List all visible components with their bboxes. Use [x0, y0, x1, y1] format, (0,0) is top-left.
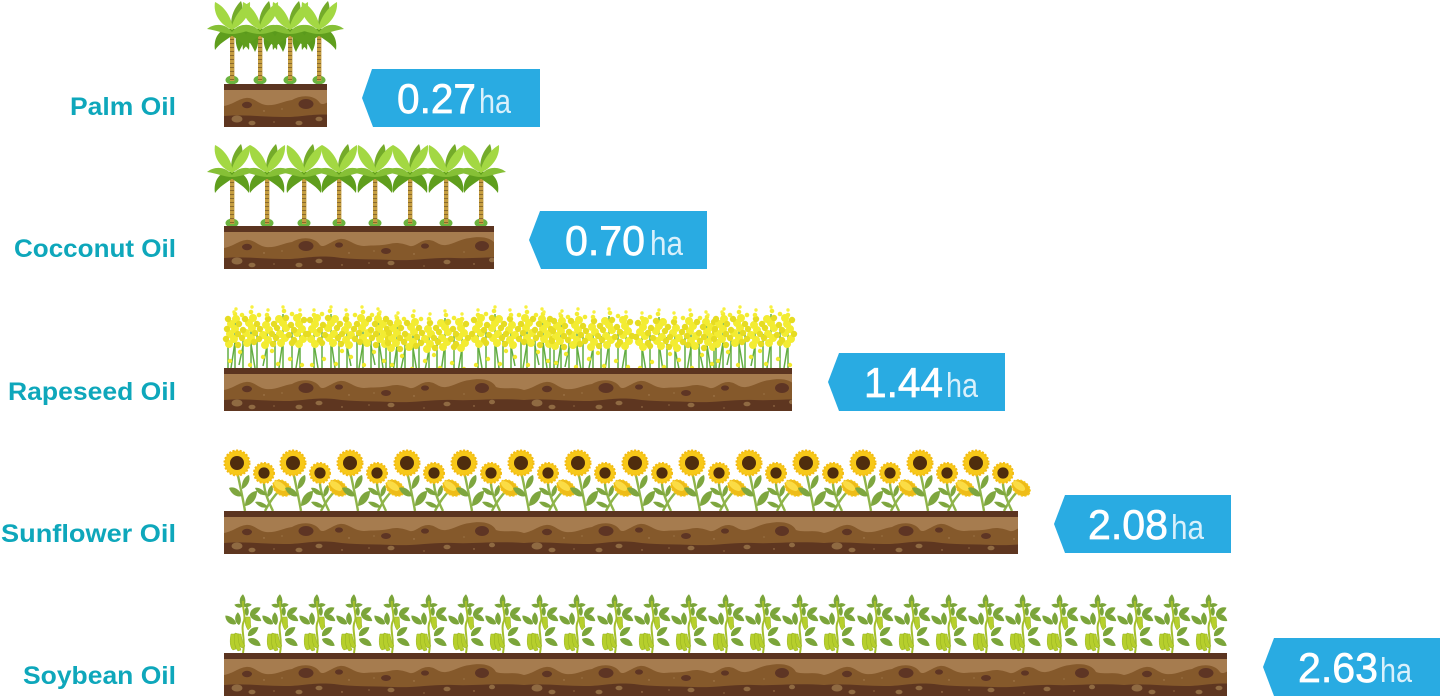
value tag: 2.08 ha: 2.08: [1088, 501, 1168, 548]
illustration: soybean plants: [223, 594, 1229, 653]
value tag: 0.27 ha: ha: [479, 83, 511, 121]
value tag: 1.44 ha: [828, 353, 1005, 411]
row: sunflower oil: [1, 450, 1231, 554]
label: palm oil: Palm Oil: [70, 93, 176, 121]
soil strip: [224, 511, 1018, 554]
value tag: 0.70 ha: [529, 211, 707, 269]
row: soybean oil: [23, 594, 1440, 696]
label: coconut oil: Cocconut Oil: [14, 235, 176, 263]
value tag: 0.70 ha: ha: [650, 225, 683, 263]
row: rapeseed oil: [8, 307, 1005, 411]
value tag: 0.27 ha: 0.27: [397, 75, 476, 122]
value tag: 2.63 ha: ha: [1380, 652, 1412, 690]
illustration: palm trees: [207, 1, 344, 84]
value tag: 1.44 ha: 1.44: [864, 359, 943, 406]
label: rapeseed oil: Rapeseed Oil: [8, 378, 176, 406]
value tag: 0.27 ha: [362, 69, 540, 127]
label: soybean oil: Soybean Oil: [23, 662, 176, 690]
soil strip: [224, 653, 1227, 696]
value tag: 2.08 ha: [1054, 495, 1231, 553]
illustration: sunflowers: [224, 450, 1033, 511]
value tag: 2.63 ha: [1263, 638, 1440, 696]
value tag: 1.44 ha: ha: [946, 367, 978, 405]
value tag: 0.70 ha: 0.70: [565, 217, 645, 264]
value tag: 2.63 ha: 2.63: [1298, 644, 1378, 691]
label: sunflower oil: Sunflower Oil: [1, 520, 176, 548]
soil strip: [224, 226, 494, 269]
illustration: rapeseed plants: [226, 307, 794, 372]
value tag: 2.08 ha: ha: [1171, 509, 1204, 547]
illustration: coconut trees: [207, 144, 506, 228]
soil strip: [224, 84, 327, 127]
row: palm oil: [70, 1, 540, 127]
row: coconut oil: [14, 144, 707, 269]
soil strip: [224, 368, 792, 411]
